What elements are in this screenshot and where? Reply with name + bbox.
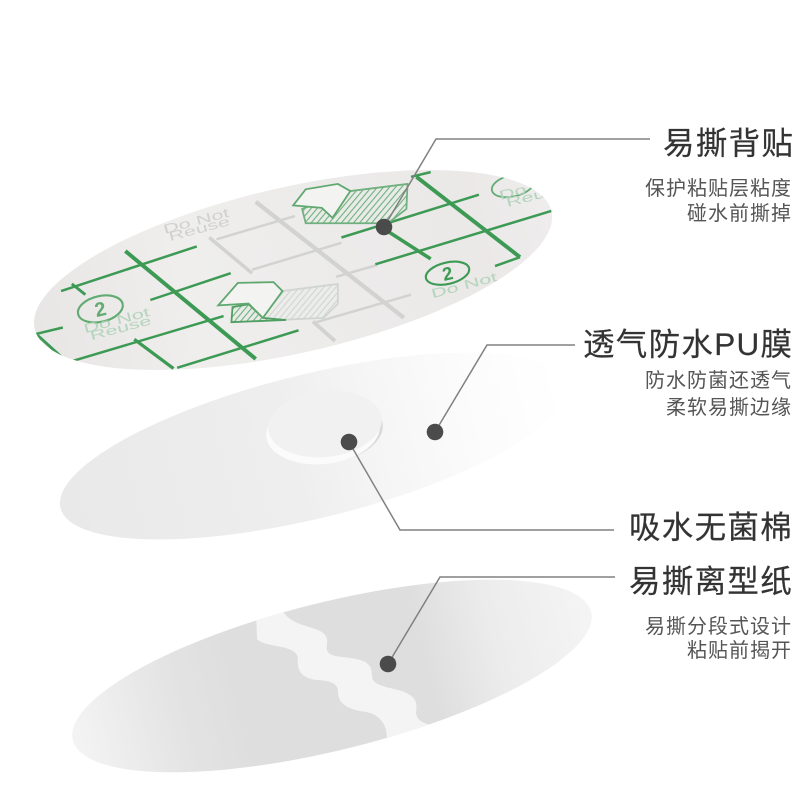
callout line: film — [435, 345, 575, 432]
printed text: do not reuse: Do Not — [162, 205, 231, 237]
backing sheet ellipse — [16, 130, 570, 410]
badge: number 2 right — [424, 260, 470, 286]
printed text: do not reuse — [82, 171, 569, 343]
label: easy-tear backing: 保护粘贴层粘度 — [645, 177, 792, 200]
film ellipse — [43, 314, 583, 578]
printed text: do not reuse: Do Not — [497, 171, 566, 203]
callout line: cotton — [349, 442, 614, 530]
printed text: do not reuse: Reuse — [505, 180, 569, 210]
badge: number 2 right: 2 — [440, 262, 455, 285]
absorbent cotton pad — [263, 385, 386, 470]
icon: peel tab upper — [293, 184, 407, 223]
label: easy-tear backing: 碰水前撕掉 — [687, 202, 792, 225]
panel: easy-tear release paper layer — [72, 580, 592, 772]
label: PU film: 透气防水PU膜 — [583, 326, 793, 362]
printed text: do not reuse: Reuse — [167, 214, 232, 244]
paper ellipse — [55, 540, 609, 800]
label: easy-tear backing — [645, 125, 794, 225]
icon: peel tab lower — [218, 282, 338, 322]
label: PU film: 柔软易撕边缘 — [666, 396, 792, 419]
printed text: do not reuse: Do Not — [82, 305, 151, 336]
label: release paper: 粘贴前揭开 — [687, 639, 792, 662]
label: PU film — [583, 326, 793, 419]
label: easy-tear backing: 易撕背贴 — [663, 125, 794, 161]
callout line: release paper — [388, 577, 615, 664]
badge: partial top right — [490, 177, 532, 198]
printed green grid and marks — [36, 170, 569, 369]
label: release paper — [629, 563, 793, 662]
panel: easy-tear backing layer — [34, 170, 552, 370]
callout line: backing — [384, 139, 650, 227]
wavy tear band — [256, 612, 428, 738]
marker dots — [341, 219, 443, 672]
printed text: do not reuse: Reuse — [88, 313, 153, 343]
printed text: do not reuse: Do Not — [430, 270, 499, 301]
label: release paper: 易撕分段式设计 — [645, 615, 792, 638]
label: PU film: 防水防菌还透气 — [645, 369, 792, 392]
label: release paper: 易撕离型纸 — [629, 563, 793, 599]
label: cotton: 吸水无菌棉 — [629, 509, 793, 545]
panel: breathable waterproof PU film layer — [43, 314, 583, 578]
badge: number 2 left: 2 — [93, 298, 109, 322]
badge: number 2 left — [76, 294, 124, 324]
